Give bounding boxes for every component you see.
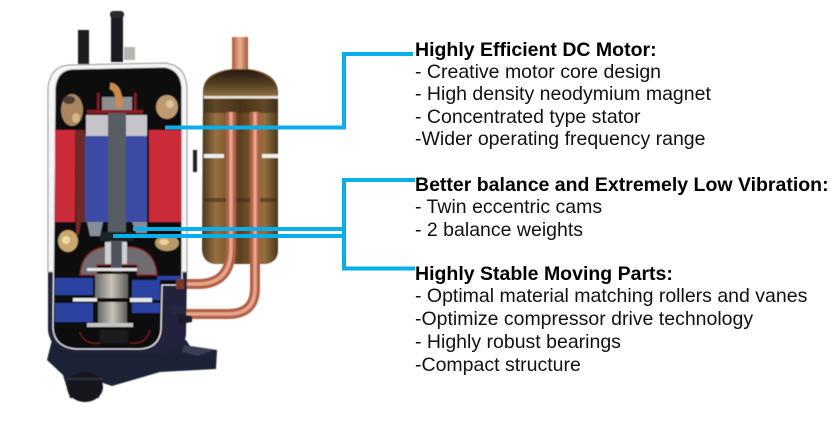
text block: motor: - High density neodymium magnet bbox=[415, 83, 711, 105]
text block: motor: Highly Efficient DC Motor: bbox=[415, 38, 657, 60]
text block: balance bbox=[415, 174, 829, 240]
icon: copper pipes bbox=[178, 112, 255, 314]
icon: balance weights bbox=[87, 222, 147, 236]
icon: discharge and suction stubs bbox=[78, 11, 135, 64]
text block: balance: Better balance and Extremely Low Vibration: bbox=[415, 174, 829, 196]
text block: balance: - Twin eccentric cams bbox=[415, 196, 602, 218]
text block: balance: - 2 balance weights bbox=[415, 218, 583, 240]
icon: shaft bbox=[108, 113, 126, 245]
icon: shaft collar bbox=[105, 242, 127, 272]
panel: compressor shell bbox=[48, 63, 187, 353]
text block: motor: - Concentrated type stator bbox=[415, 106, 640, 128]
icon: copper discharge bend bbox=[110, 86, 119, 108]
callout lines: motor bbox=[165, 54, 413, 128]
icon: pump housing blue bbox=[55, 276, 181, 322]
panel: compressor interior bbox=[53, 67, 182, 349]
icon: pipe fittings bbox=[172, 279, 192, 324]
text block: moving parts: -Compact structure bbox=[415, 354, 581, 376]
text block: motor: - Creative motor core design bbox=[415, 61, 661, 83]
text block: moving parts: -Optimize compressor drive technology bbox=[415, 308, 753, 330]
text block: motor: -Wider operating frequency range bbox=[415, 128, 706, 150]
icon: rotor top cap bbox=[86, 93, 147, 136]
icon: stator red blocks bbox=[55, 130, 181, 222]
text block: motor bbox=[415, 38, 711, 150]
text block: moving parts bbox=[415, 262, 807, 376]
callout lines: balance and moving parts bbox=[113, 180, 415, 268]
icon: pump dome bbox=[80, 247, 157, 275]
icon: blue rotor bbox=[85, 135, 147, 222]
text block: moving parts: - Optimal material matching rollers and vanes bbox=[415, 285, 807, 307]
icon: compressor base and foot bbox=[47, 340, 217, 402]
icon: pump rollers bbox=[80, 268, 150, 343]
icon: accumulator tank bbox=[193, 37, 278, 264]
text block: moving parts: Highly Stable Moving Parts: bbox=[415, 262, 673, 284]
icon: windings bbox=[58, 94, 179, 252]
text block: moving parts: - Highly robust bearings bbox=[415, 331, 621, 353]
